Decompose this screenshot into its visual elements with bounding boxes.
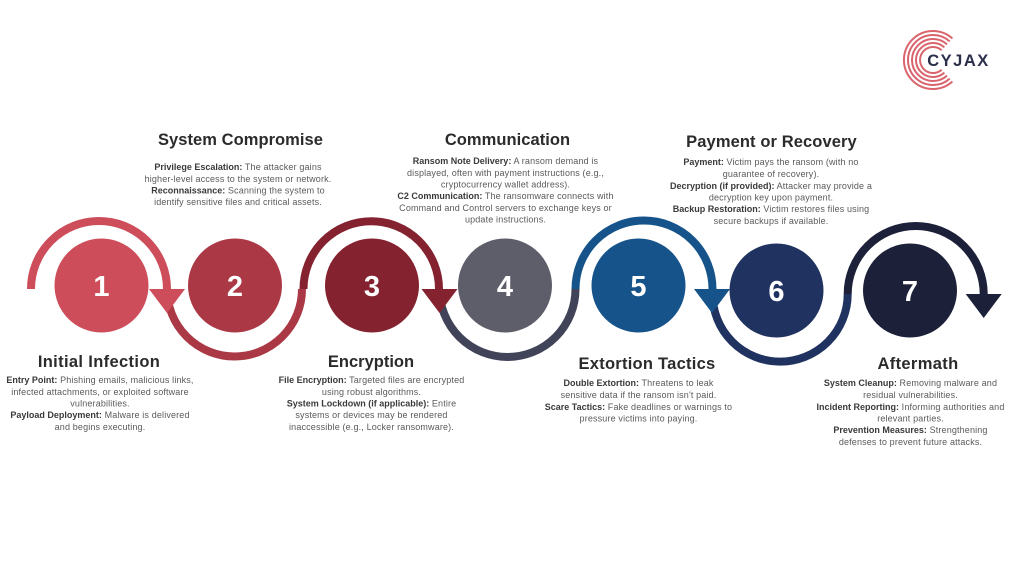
text block: Communication: cryptocurrency wallet address).	[441, 180, 570, 190]
text block: Aftermath: Incident Reporting: Informing authorities and	[817, 402, 1004, 412]
heading: Aftermath: Aftermath	[877, 355, 959, 373]
text block: Initial Infection: vulnerabilities.	[70, 398, 130, 408]
text block: System Compromise: identify sensitive files and critical assets.	[154, 197, 322, 207]
text block: Extortion Tactics: Double Extortion: Threatens to leak	[563, 378, 714, 388]
heading: Encryption: Encryption	[328, 353, 414, 371]
step 7 circle	[863, 244, 957, 338]
text block: Payment or Recovery	[670, 157, 872, 226]
heading: Initial Infection: Initial Infection	[38, 353, 160, 371]
text block: System Compromise: Privilege Escalation: The attacker gains	[154, 162, 322, 172]
text block: Initial Infection: Entry Point: Phishing emails, malicious links,	[6, 375, 194, 385]
text block: Communication: update instructions.	[465, 214, 546, 224]
text block: Initial Infection: Payload Deployment: Malware is delivered	[10, 410, 190, 420]
step 5 circle: 5	[630, 271, 647, 303]
step 1 circle: 1	[93, 271, 110, 303]
text block: Communication: displayed, often with payment instructions (e.g.,	[407, 168, 604, 178]
text block: System Compromise: higher-level access to the system or network.	[145, 174, 331, 184]
arrow: step 3 arc	[304, 221, 458, 313]
logo: CYJAX	[904, 31, 993, 89]
step 3 circle: 3	[364, 271, 380, 303]
text block: Encryption: using robust algorithms.	[322, 387, 421, 397]
text block: Aftermath: relevant parties.	[877, 414, 944, 424]
text block: Aftermath	[817, 378, 1004, 447]
text block: Extortion Tactics: sensitive data if the ransom isn't paid.	[561, 390, 716, 400]
step 6 circle: 6	[768, 276, 785, 308]
text block: Encryption: inaccessible (e.g., Locker ransomware).	[289, 422, 454, 432]
text block: Payment or Recovery: decryption key upon payment.	[709, 192, 833, 202]
text block: Payment or Recovery: Backup Restoration: Victim restores files using	[673, 204, 869, 214]
step 1 circle	[54, 238, 148, 332]
text block: Payment or Recovery: secure backups if available.	[714, 216, 828, 226]
text block: Aftermath: defenses to prevent future attacks.	[839, 437, 982, 447]
arrow: step 2 arc	[167, 289, 302, 356]
text block: Encryption	[279, 375, 464, 432]
step 6 circle	[730, 244, 824, 338]
text block: Communication: C2 Communication: The ransomware connects with	[397, 191, 614, 201]
arrow: step 1 arc	[31, 221, 185, 313]
text block: Payment or Recovery: Payment: Victim pays the ransom (with no	[683, 157, 859, 167]
step 2 circle	[188, 238, 282, 332]
heading: Extortion Tactics: Extortion Tactics	[579, 355, 715, 373]
text block: Initial Infection: infected attachments, or exploited software	[11, 387, 189, 397]
heading: System Compromise: System Compromise	[158, 131, 323, 149]
text block: Encryption: systems or devices may be rendered	[295, 410, 448, 420]
text block: Communication	[397, 156, 614, 224]
text block: Communication: Ransom Note Delivery: A ransom demand is	[413, 156, 599, 166]
text block: Extortion Tactics: pressure victims into paying.	[580, 414, 697, 424]
text block: Initial Infection	[6, 375, 194, 432]
text block: Aftermath: residual vulnerabilities.	[863, 390, 958, 400]
text block: Payment or Recovery: Decryption (if provided): Attacker may provide a	[670, 181, 872, 191]
text block: Communication: Command and Control servers to exchange keys or	[399, 203, 612, 213]
text block: System Compromise	[145, 162, 331, 207]
step 5 circle	[592, 238, 686, 332]
arrow: step 7 arc	[848, 226, 1002, 318]
arrow: step 5 arc	[576, 220, 730, 313]
step 7 circle: 7	[902, 276, 918, 308]
text block: System Compromise: Reconnaissance: Scanning the system to	[151, 186, 325, 196]
heading: Communication: Communication	[445, 131, 570, 149]
text block: Extortion Tactics: Scare Tactics: Fake deadlines or warnings to	[545, 402, 732, 412]
step 4 circle: 4	[497, 271, 513, 303]
text block: Encryption: File Encryption: Targeted files are encrypted	[279, 375, 464, 385]
logo: CYJAX: CYJAX	[927, 52, 990, 70]
text block: Payment or Recovery: guarantee of recovery).	[723, 169, 819, 179]
step 2 circle: 2	[227, 271, 243, 303]
heading: Payment or Recovery: Payment or Recovery	[686, 133, 858, 151]
text block: Encryption: System Lockdown (if applicable): Entire	[287, 398, 456, 408]
text block: Aftermath: Prevention Measures: Strengthening	[833, 425, 988, 435]
arrow: step 4 arc	[440, 289, 576, 357]
arrow: step 6 arc	[712, 294, 848, 362]
text block: Extortion Tactics	[545, 378, 732, 424]
step 3 circle	[325, 238, 419, 332]
step 4 circle	[458, 238, 552, 332]
text block: Initial Infection: and begins executing.	[55, 422, 145, 432]
text block: Aftermath: System Cleanup: Removing malware and	[824, 378, 997, 388]
